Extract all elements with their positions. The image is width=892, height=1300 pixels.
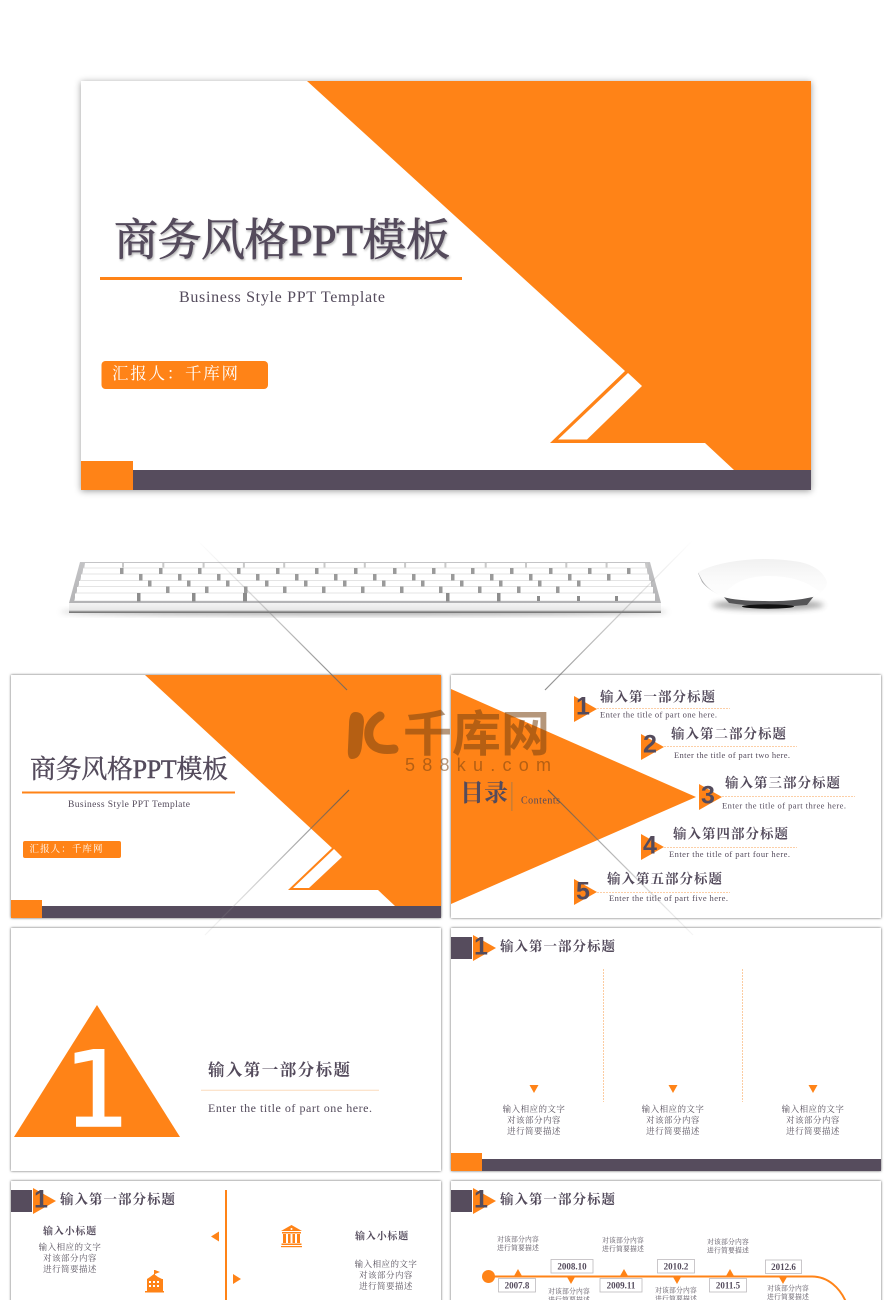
slide header <box>451 1186 616 1214</box>
divider line <box>201 1089 379 1092</box>
panel: contents slide <box>451 675 881 918</box>
icon: bank building <box>281 1225 302 1247</box>
milestone 2007.8: 2007.8 <box>505 1280 530 1290</box>
left text block: 输入相应的文字 <box>39 1242 101 1252</box>
contents item 1 <box>574 688 730 722</box>
contents item 1: Enter the title of part one here. <box>600 710 717 720</box>
slide header: 1 <box>474 932 488 960</box>
watermark name: 千库网 <box>403 695 550 766</box>
milestone 2008.10: 对该部分内容 <box>548 1286 590 1296</box>
column dividers <box>604 969 742 1102</box>
column 3 <box>782 1085 844 1136</box>
footer orange square <box>11 900 42 918</box>
left text block: 对该部分内容 <box>43 1253 97 1263</box>
milestone 2007.8 <box>497 1234 539 1292</box>
slide header: 1 <box>34 1186 48 1214</box>
contents item 4: Enter the title of part four here. <box>669 849 790 859</box>
footer bar <box>11 906 441 918</box>
right text block: 进行简要描述 <box>359 1281 413 1291</box>
contents item 2 <box>641 726 797 760</box>
milestone 2011.5: 进行简要描述 <box>707 1246 749 1254</box>
diagonal decorative line upper left <box>197 540 347 690</box>
left pointer <box>211 1232 219 1242</box>
contents item 3: Enter the title of part three here. <box>722 800 846 810</box>
column 2: 进行简要描述 <box>646 1126 700 1136</box>
illustration: keyboard <box>60 562 668 615</box>
diagonal decorative line lower right <box>548 790 693 935</box>
column 3: 输入相应的文字 <box>782 1104 844 1114</box>
milestone 2009.11: 2009.11 <box>607 1280 636 1290</box>
timeline curve <box>482 1270 846 1300</box>
column 3: 进行简要描述 <box>786 1126 840 1136</box>
contents item 5 <box>574 870 730 906</box>
contents item 1: 输入第一部分标题 <box>600 688 716 704</box>
column 3: 对该部分内容 <box>786 1115 840 1125</box>
left text block: 进行简要描述 <box>43 1264 97 1274</box>
milestone 2007.8: 进行简要描述 <box>497 1243 539 1252</box>
watermark url: 588ku.com <box>405 755 551 775</box>
large orange triangle with number: 1 <box>64 1029 130 1151</box>
milestone 2011.5: 对该部分内容 <box>707 1237 749 1246</box>
milestone 2009.11: 对该部分内容 <box>602 1236 644 1244</box>
milestone 2012.6: 对该部分内容 <box>767 1284 809 1292</box>
panel: timeline slide <box>451 1181 881 1300</box>
title: 商务风格PPT模板 <box>30 755 228 784</box>
presenter badge: 汇报人：千库网 <box>112 364 238 383</box>
diagonal decorative line upper right <box>545 540 693 690</box>
white diagonal strip <box>293 849 342 888</box>
left text block: 输入小标题 <box>43 1224 97 1238</box>
orange angled shape <box>145 675 441 906</box>
milestone 2008.10 <box>548 1260 593 1300</box>
column 2: 输入相应的文字 <box>642 1104 704 1114</box>
title underline <box>22 792 235 794</box>
contents item 5: 输入第五部分标题 <box>607 870 722 886</box>
right text block: 输入相应的文字 <box>355 1259 417 1269</box>
main title: 商务风格PPT模板 <box>114 216 450 265</box>
panel: cover slide thumbnail <box>11 675 441 918</box>
large orange triangle with number <box>14 1005 180 1151</box>
milestone 2007.8: 对该部分内容 <box>497 1234 539 1244</box>
footer bar <box>81 470 811 490</box>
footer orange square <box>451 1153 482 1171</box>
contents item 4 <box>641 826 797 860</box>
milestone 2010.2: 对该部分内容 <box>655 1286 697 1294</box>
slide header: 1 <box>474 1186 488 1214</box>
white diagonal strip <box>558 373 642 440</box>
slide header: 输入第一部分标题 <box>60 1191 176 1207</box>
column 1 <box>503 1085 565 1136</box>
heading: contents: 目录 <box>460 780 508 807</box>
right text block: 对该部分内容 <box>359 1270 413 1280</box>
diagonal decorative line lower left <box>205 790 349 935</box>
right text block <box>355 1230 417 1291</box>
contents item 2: 2 <box>643 730 657 758</box>
slide header: 输入第一部分标题 <box>500 938 616 954</box>
illustration: mouse <box>698 559 827 610</box>
footer orange square <box>81 461 133 490</box>
column 1: 输入相应的文字 <box>503 1104 565 1114</box>
contents item 3 <box>699 774 855 810</box>
contents item 2: Enter the title of part two here. <box>674 750 790 760</box>
milestone 2009.11 <box>600 1236 644 1292</box>
milestone 2011.5 <box>707 1237 749 1292</box>
panel: section divider slide <box>11 928 441 1171</box>
contents item 3: 输入第三部分标题 <box>725 774 840 790</box>
section subtitle: Enter the title of part one here. <box>208 1101 372 1115</box>
title underline <box>100 277 462 280</box>
right pointer <box>233 1274 241 1284</box>
panel: two side feature slide <box>11 1181 441 1300</box>
presenter badge <box>23 841 121 858</box>
milestone 2012.6: 2012.6 <box>771 1262 796 1272</box>
column 2: 对该部分内容 <box>646 1115 700 1125</box>
section title: 输入第一部分标题 <box>208 1060 350 1080</box>
heading: contents <box>460 780 560 811</box>
right text block: 输入小标题 <box>355 1230 409 1242</box>
column 1: 对该部分内容 <box>507 1115 561 1125</box>
milestone 2012.6 <box>766 1260 809 1300</box>
contents item 5: Enter the title of part five here. <box>609 893 728 903</box>
contents item 3: 3 <box>701 782 715 810</box>
contents item 4: 4 <box>643 832 657 860</box>
watermark symbol <box>348 712 394 759</box>
column 2 <box>642 1085 704 1136</box>
contents item 2: 输入第二部分标题 <box>671 726 786 742</box>
orange angled shape <box>307 81 811 470</box>
milestone 2010.2 <box>655 1260 697 1300</box>
footer bar <box>451 1159 881 1171</box>
panel: three column slide <box>451 928 881 1171</box>
milestone 2011.5: 2011.5 <box>716 1280 741 1290</box>
presenter badge: 汇报人：千库网 <box>30 843 102 855</box>
column 1: 进行简要描述 <box>507 1126 561 1136</box>
slide header <box>11 1186 176 1214</box>
milestone 2010.2: 2010.2 <box>664 1262 689 1272</box>
panel: main cover slide <box>81 81 811 490</box>
milestone 2008.10: 2008.10 <box>557 1262 587 1272</box>
central timeline line <box>225 1190 227 1300</box>
contents item 1: 1 <box>576 692 590 720</box>
timeline markers <box>514 1269 787 1284</box>
subtitle: Business Style PPT Template <box>179 289 385 306</box>
contents item 5: 5 <box>576 878 590 906</box>
contents item 4: 输入第四部分标题 <box>673 826 788 842</box>
subtitle: Business Style PPT Template <box>68 800 190 810</box>
heading: contents: Contents <box>521 796 560 806</box>
watermark logo <box>348 695 551 775</box>
slide header: 输入第一部分标题 <box>500 1191 616 1207</box>
large orange triangle <box>451 689 696 904</box>
presenter badge <box>102 361 268 389</box>
icon: school building <box>145 1270 164 1292</box>
slide header <box>451 932 616 961</box>
milestone 2009.11: 进行简要描述 <box>602 1244 644 1253</box>
left text block <box>39 1224 101 1274</box>
